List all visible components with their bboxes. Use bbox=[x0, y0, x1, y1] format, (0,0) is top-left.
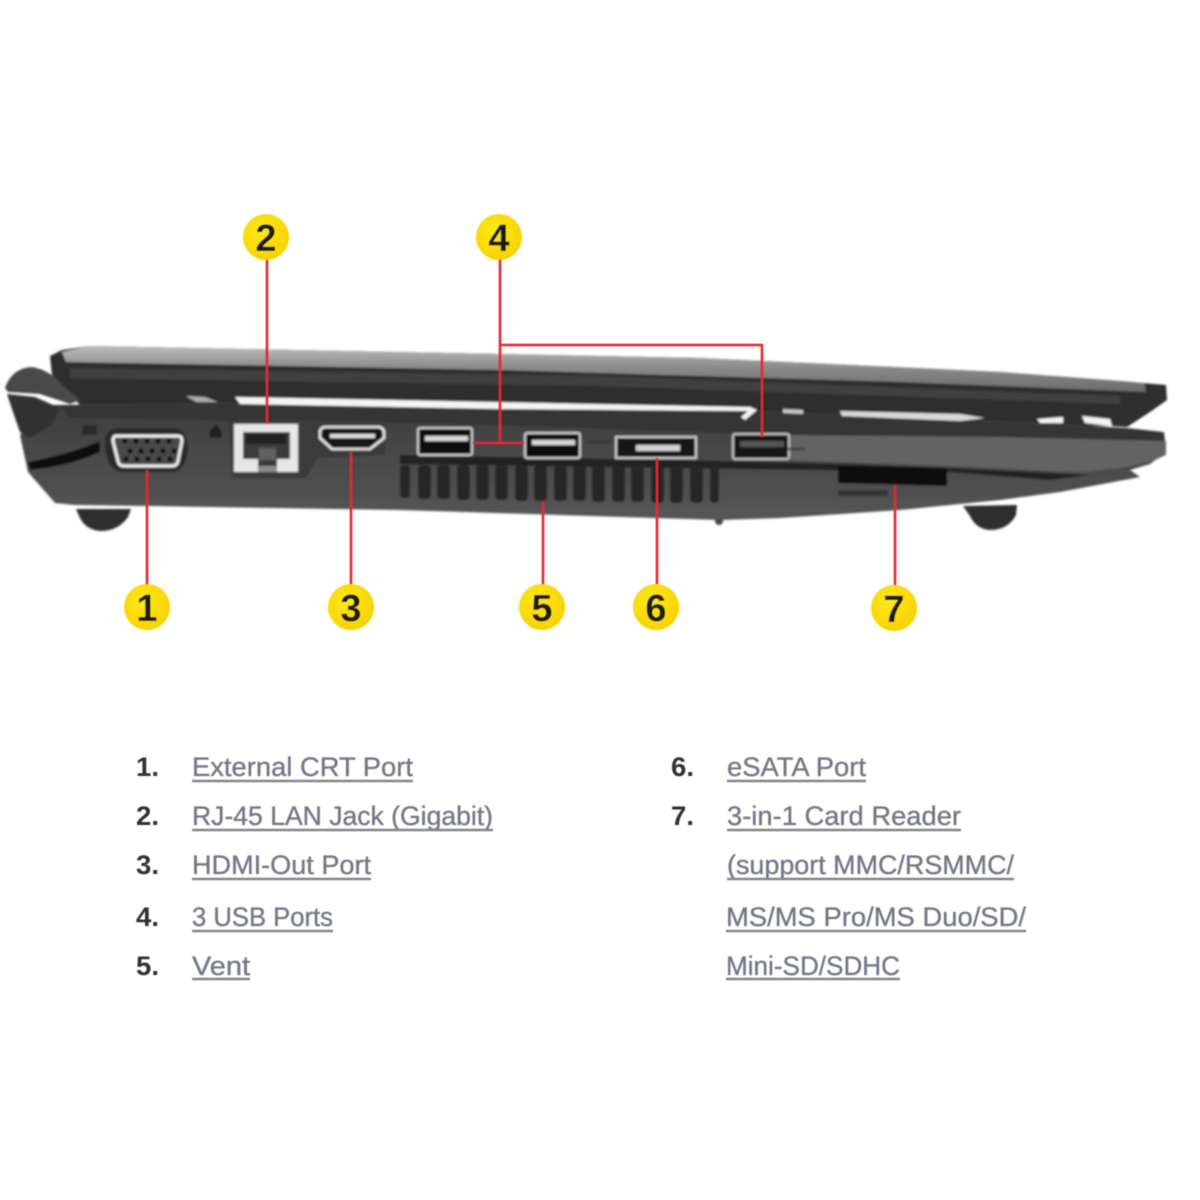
item 7: (support MMC/RSMMC/ bbox=[727, 850, 1014, 880]
item 4 bbox=[136, 902, 333, 932]
item 7: MS/MS Pro/MS Duo/SD/ bbox=[726, 902, 1026, 932]
vent slats bbox=[400, 465, 719, 503]
badge 2 bbox=[243, 214, 289, 260]
legend right column bbox=[671, 752, 1026, 981]
callout lines bbox=[147, 256, 895, 590]
base dark strip under ports bbox=[400, 455, 1090, 480]
icon: USB symbol left bbox=[587, 442, 805, 449]
badge 3: 3 bbox=[340, 588, 362, 630]
numbered badges bbox=[124, 214, 917, 631]
laptop lid bbox=[50, 346, 1167, 427]
item 2: RJ-45 LAN Jack (Gigabit) bbox=[192, 801, 493, 831]
badge 1 bbox=[124, 584, 170, 630]
item 2: 2. bbox=[136, 801, 159, 831]
icon: network bbox=[209, 424, 222, 438]
LAN / HDMI recess bbox=[228, 420, 385, 478]
hinge lower bbox=[7, 394, 60, 438]
lid middle band bbox=[70, 368, 1120, 404]
badge 3 bbox=[328, 584, 374, 630]
icon: VGA square bbox=[82, 425, 97, 435]
base top band bbox=[60, 404, 1165, 441]
small center foot bbox=[715, 517, 723, 525]
legend left column bbox=[136, 752, 493, 981]
LAN port bbox=[234, 424, 298, 472]
item 5: 5. bbox=[136, 951, 159, 981]
laptop side view bbox=[5, 346, 1167, 531]
card reader slot bbox=[838, 466, 947, 486]
item 5: Vent bbox=[192, 951, 251, 981]
badge 5: 5 bbox=[531, 588, 553, 630]
item 4: 4. bbox=[136, 902, 159, 932]
eSATA port bbox=[616, 437, 696, 458]
badge 6: 6 bbox=[645, 588, 667, 630]
card reader logo bbox=[838, 490, 888, 496]
optical drive panel bbox=[790, 435, 1166, 472]
VGA port bbox=[113, 436, 182, 466]
item 6: 6. bbox=[671, 752, 694, 782]
rubber foot: left bbox=[76, 509, 131, 531]
badge 7 bbox=[871, 585, 917, 631]
badge 6 bbox=[633, 584, 679, 630]
USB port 3 bbox=[733, 434, 789, 459]
item 7: 3-in-1 Card Reader bbox=[727, 801, 961, 831]
hinge cap bbox=[5, 367, 80, 404]
item 3: HDMI-Out Port bbox=[192, 850, 371, 880]
badge 2: 2 bbox=[255, 218, 277, 260]
badge 1: 1 bbox=[136, 588, 158, 630]
USB port 1 bbox=[418, 428, 472, 455]
HDMI port bbox=[320, 427, 384, 449]
hinge black groove bbox=[28, 441, 100, 470]
badge 4 bbox=[476, 214, 522, 260]
item 3: 3. bbox=[136, 850, 159, 880]
badge 4: 4 bbox=[488, 218, 510, 260]
item 7 bbox=[671, 801, 1026, 981]
item 6: eSATA Port bbox=[727, 752, 866, 782]
item 1: 1. bbox=[136, 752, 159, 782]
USB bracket bbox=[473, 256, 762, 443]
white gaps under the lid bbox=[186, 396, 1112, 426]
item 4: 3 USB Ports bbox=[192, 902, 333, 932]
item 7: Mini-SD/SDHC bbox=[726, 951, 900, 981]
item 5 bbox=[136, 951, 251, 981]
item 1: External CRT Port bbox=[192, 752, 413, 782]
badge 7: 7 bbox=[883, 589, 905, 631]
HDMI tongue bbox=[330, 434, 375, 438]
laptop base bbox=[20, 403, 1166, 520]
rubber foot: right bbox=[963, 505, 1017, 530]
VGA port recess bbox=[105, 428, 188, 472]
lid silver edge bbox=[62, 346, 1146, 392]
USB port 2 bbox=[525, 433, 580, 458]
badge 5 bbox=[519, 584, 565, 630]
item 7: 7. bbox=[671, 801, 694, 831]
